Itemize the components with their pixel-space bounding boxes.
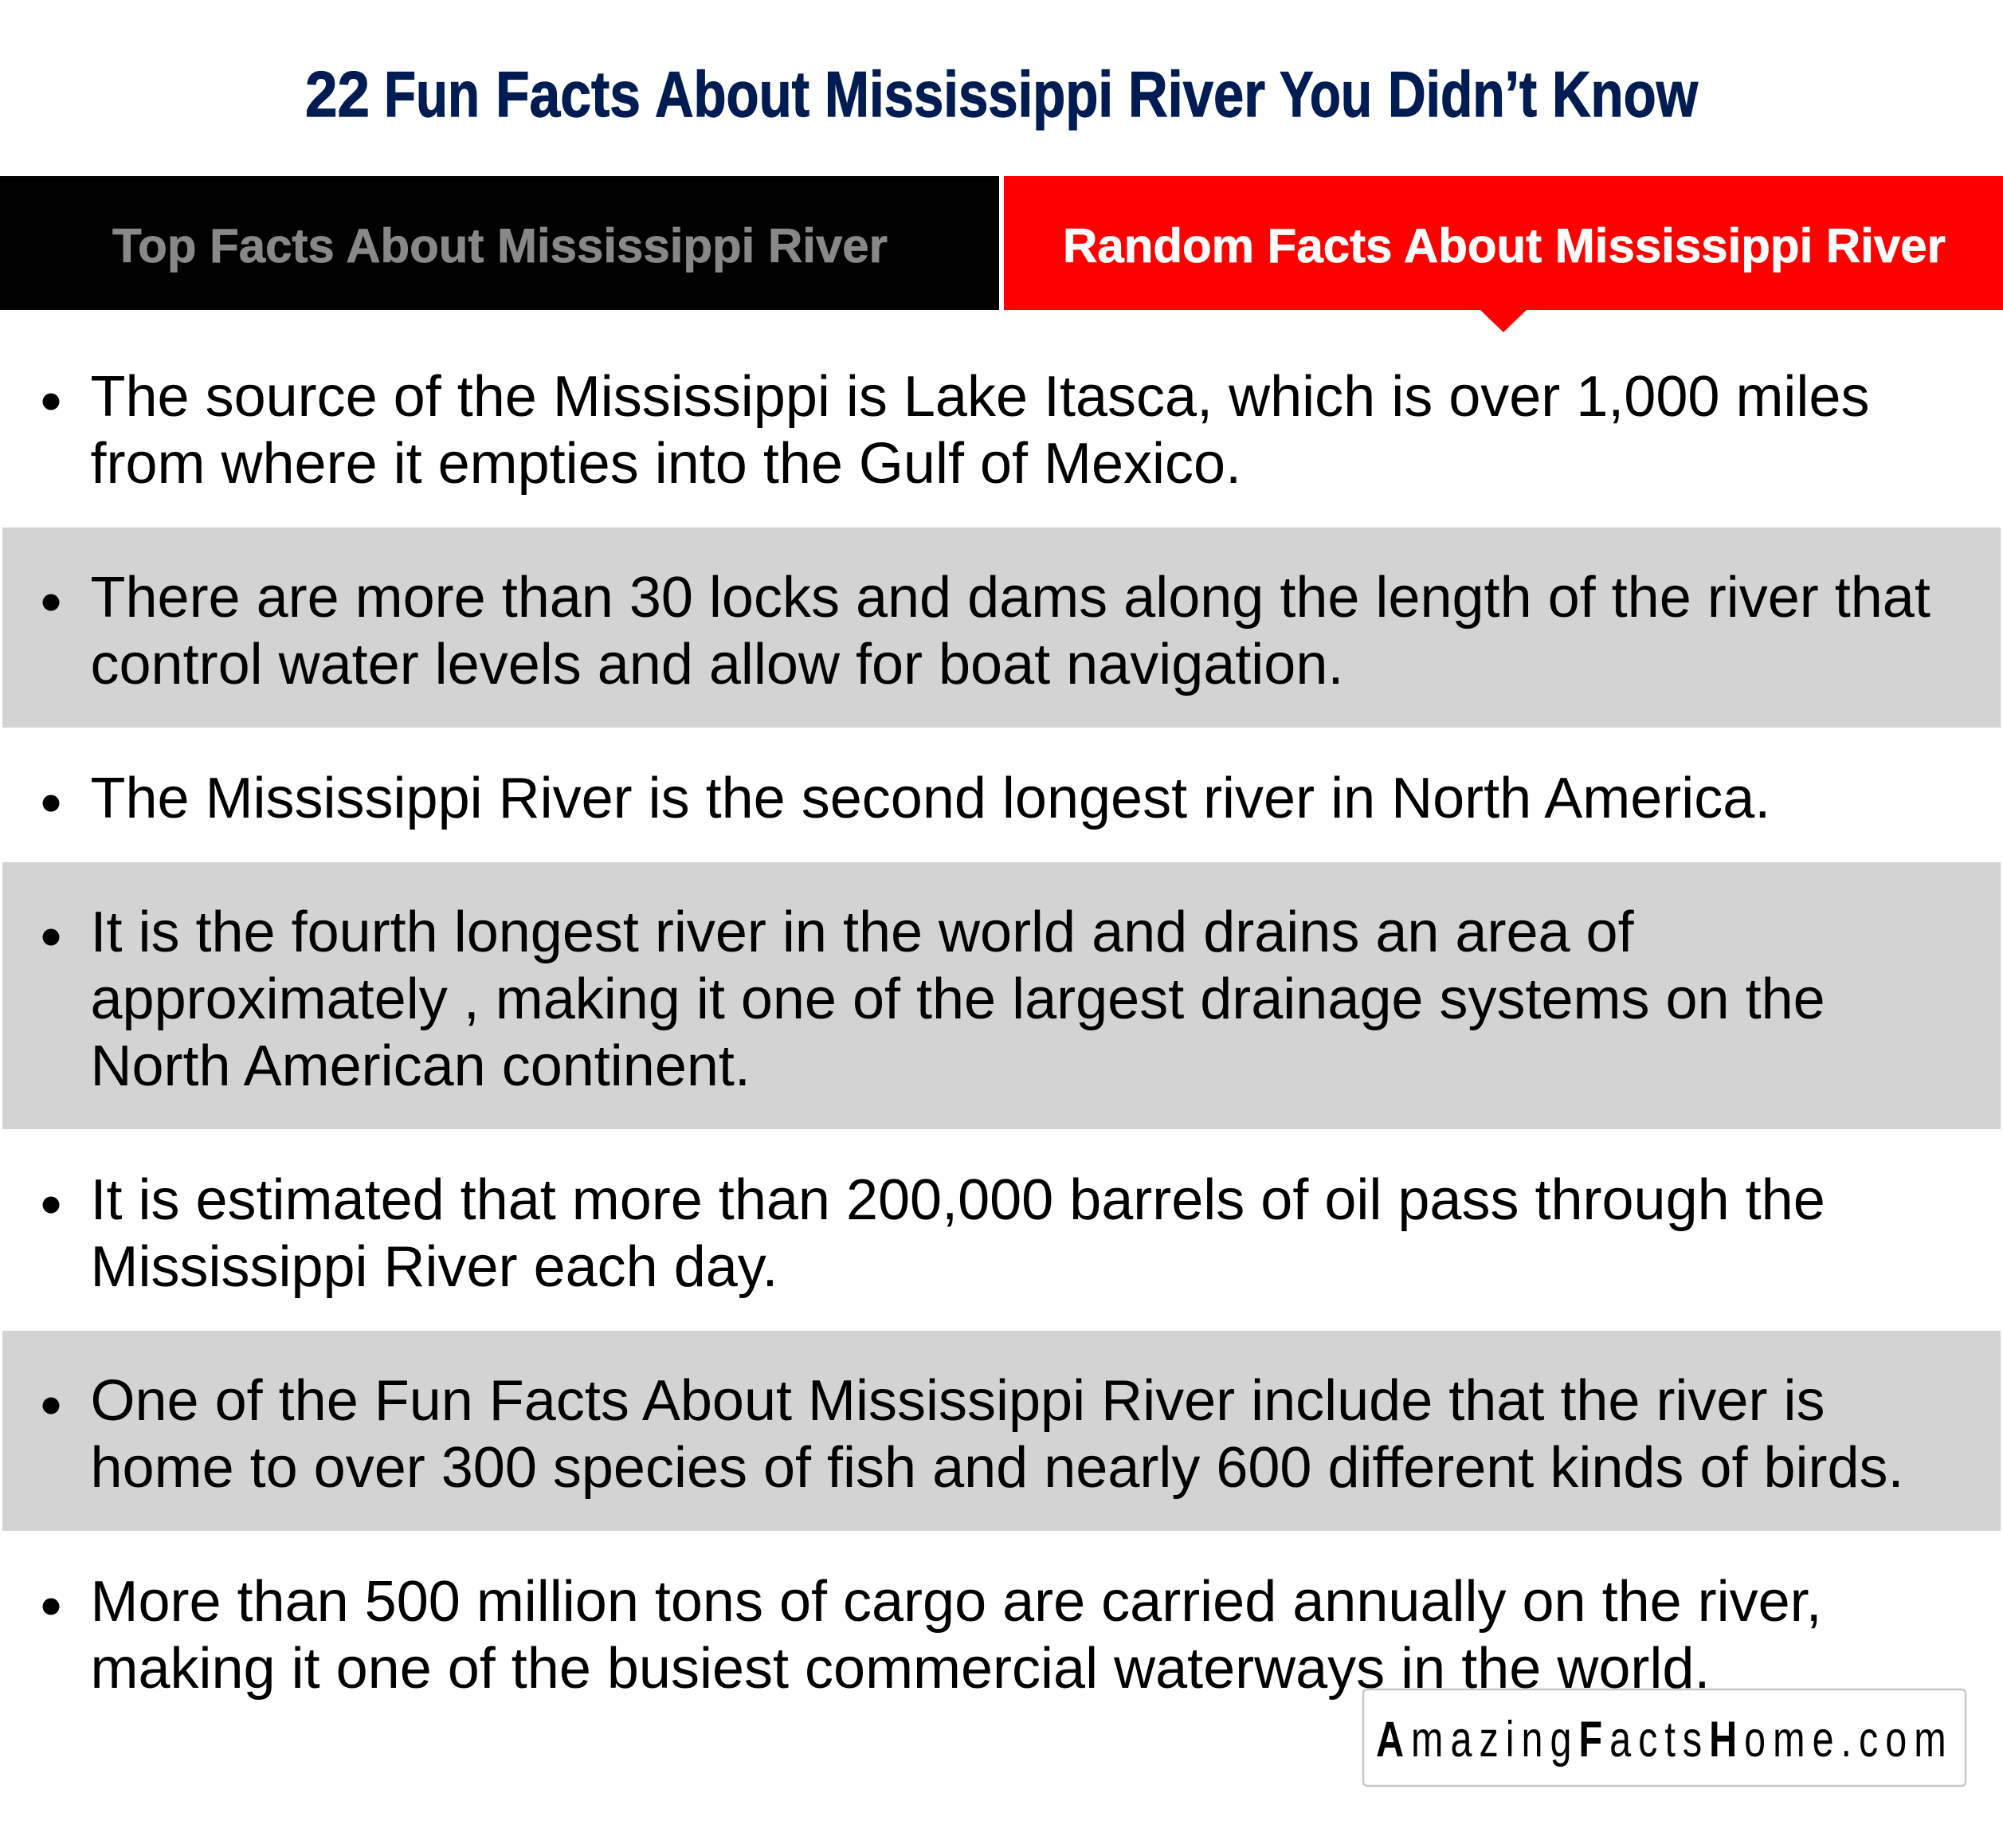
watermark badge	[1363, 1689, 1966, 1786]
fact 5	[43, 1168, 1825, 1299]
fact 7: More than 500 million tons of cargo are carried annually on the river,	[91, 1570, 1822, 1634]
fact 6: One of the Fun Facts About Mississippi River include that the river is	[91, 1369, 1825, 1433]
fact 5: Mississippi River each day.	[91, 1235, 778, 1299]
fact 5: It is estimated that more than 200,000 barrels of oil pass through the	[91, 1168, 1825, 1232]
watermark badge: AmazingFactsHome.com	[1376, 1711, 1954, 1767]
title: Mississippi	[825, 59, 1113, 131]
tab: random facts	[1004, 176, 2003, 332]
title: You	[1280, 59, 1372, 131]
fact 4: North American continent.	[91, 1034, 751, 1098]
fact 3: The Mississippi River is the second longest river in North America.	[91, 767, 1770, 830]
tab: random facts: Random Facts About Mississippi River	[1063, 219, 1946, 273]
title: River	[1128, 59, 1265, 131]
fact 2: There are more than 30 locks and dams along the length of the river that	[91, 566, 1930, 630]
fact 2: control water levels and allow for boat navigation.	[91, 633, 1343, 696]
fact 4: approximately , making it one of the largest drainage systems on the	[91, 967, 1825, 1031]
fact 1: from where it empties into the Gulf of Mexico.	[91, 432, 1241, 496]
fact 2	[2, 528, 2001, 728]
fact 4: It is the fourth longest river in the world and drains an area of	[91, 900, 1635, 964]
title: Facts	[496, 59, 641, 131]
fact 1: The source of the Mississippi is Lake Itasca, which is over 1,000 miles	[91, 365, 1869, 429]
title: About	[655, 59, 809, 131]
tab: top facts: Top Facts About Mississippi River	[112, 219, 888, 273]
fact 1	[43, 365, 1869, 496]
title: Didn’t	[1388, 59, 1537, 131]
fact 7: making it one of the busiest commercial waterways in the world.	[91, 1637, 1710, 1701]
title: 22	[305, 59, 370, 131]
tab: top facts	[0, 176, 999, 310]
fact 4	[2, 862, 2001, 1129]
fact 6: home to over 300 species of fish and nearly 600 different kinds of birds.	[91, 1436, 1904, 1500]
fact 6	[2, 1331, 2001, 1531]
title: Fun	[384, 59, 480, 131]
fact 7	[43, 1570, 1822, 1701]
title: Know	[1552, 59, 1699, 131]
